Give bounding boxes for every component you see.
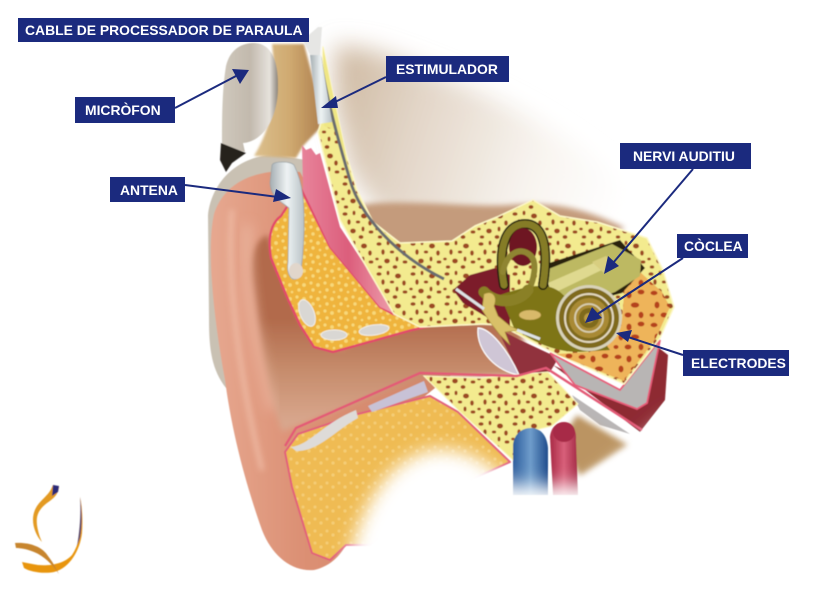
middle ear red tissue	[497, 328, 556, 375]
lower temporal bone with pores	[424, 372, 578, 462]
arrow: antena	[185, 185, 291, 202]
cochlea spiral	[556, 285, 622, 351]
lower fatty tissue of ear	[285, 396, 510, 560]
ossicles	[482, 293, 541, 345]
blue vein	[513, 428, 548, 495]
label: estimulador	[386, 56, 509, 82]
middle ear dark cavity	[453, 268, 510, 330]
pocket below cochlea with grey band and dark tissue	[550, 340, 668, 434]
electrode lead wire in bone	[320, 57, 444, 279]
label: electrodes: ELECTRODES	[691, 355, 786, 371]
eardrum	[478, 328, 519, 375]
arrow: estimulador	[321, 77, 386, 108]
semicircular canals	[484, 224, 545, 301]
label: micròfon: MICRÒFON	[85, 101, 161, 118]
temporalis muscle	[302, 145, 395, 314]
electrode array in middle ear	[456, 289, 540, 339]
outer ear pinna	[211, 171, 470, 570]
cartilage patches	[295, 297, 390, 340]
microphone processor	[220, 43, 278, 172]
upper fatty tissue of auditory canal	[270, 187, 440, 352]
label: antena	[110, 177, 185, 202]
arrow: nervi auditiu	[604, 169, 693, 274]
auditory nerve	[543, 240, 645, 310]
white fade covering lower anatomy	[350, 395, 730, 589]
label: còclea: CÒCLEA	[684, 237, 743, 254]
label: nervi auditiu	[620, 143, 751, 169]
antenna implant	[270, 162, 304, 279]
arrow: electrodes	[616, 330, 683, 355]
vestibule body	[500, 286, 610, 352]
red artery	[550, 422, 578, 495]
concha and ear canal	[231, 210, 530, 470]
label: estimulador: ESTIMULADOR	[396, 61, 498, 77]
ear anatomy illustration	[208, 27, 730, 589]
label: electrodes	[683, 350, 789, 376]
hair	[254, 44, 320, 158]
lower cartilage strip	[291, 381, 428, 451]
arrow: còclea	[585, 258, 683, 323]
label: micròfon	[75, 97, 175, 123]
behind-the-ear processor body	[208, 155, 306, 388]
head skin backdrop	[335, 45, 660, 262]
label: còclea	[677, 234, 748, 258]
label: nervi auditiu: NERVI AUDITIU	[633, 148, 735, 164]
logo	[15, 485, 82, 574]
canal lining stroke	[285, 368, 642, 446]
arrow: micròfon	[175, 69, 249, 108]
label: antena: ANTENA	[120, 182, 178, 198]
label: cable de processador de paraula: CABLE DE PROCESSADOR DE PARAULA	[25, 22, 303, 38]
temporal bone with pores	[318, 47, 674, 384]
stimulator implant	[303, 27, 332, 124]
tissue beneath canal	[560, 415, 628, 476]
label: cable de processador de paraula	[18, 18, 309, 42]
